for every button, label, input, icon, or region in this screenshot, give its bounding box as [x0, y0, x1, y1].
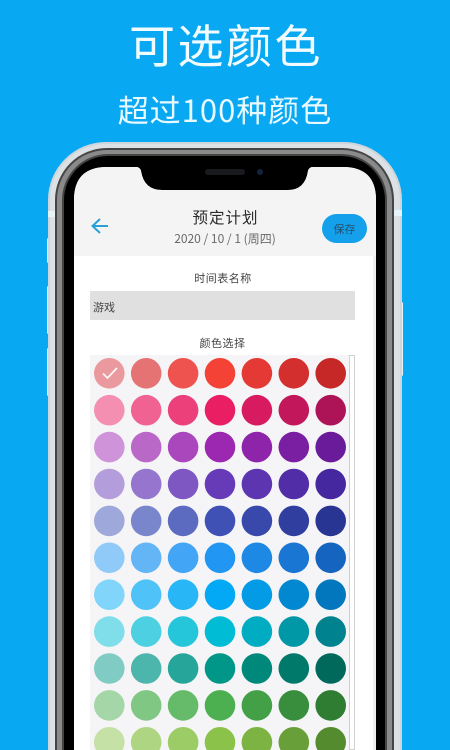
row: purple [94, 432, 346, 462]
label: color selection: 颜色选择 [200, 335, 246, 351]
icon: selected check [103, 368, 117, 378]
row: red [94, 358, 346, 389]
row: pink [94, 395, 346, 426]
row: green [94, 690, 346, 721]
icon: back arrow [92, 219, 108, 233]
notch camera and speaker [205, 169, 263, 175]
save button [322, 214, 367, 243]
row: light blue [94, 579, 346, 610]
screen [74, 167, 376, 750]
save button: 保存 [334, 221, 356, 237]
row: indigo [94, 506, 346, 536]
scrollbar [350, 356, 354, 750]
name input: 游戏 [93, 299, 115, 315]
screen right edge [373, 256, 376, 750]
row: light green [94, 727, 346, 750]
title: 可选颜色 [129, 11, 323, 77]
subtitle: 超过100种颜色 [118, 86, 332, 131]
phone body [48, 142, 402, 750]
app header [74, 167, 376, 256]
name input [90, 291, 355, 320]
color picker panel [90, 355, 354, 750]
row: cyan [94, 616, 346, 647]
header title: 预定计划 [192, 206, 259, 228]
row: teal [94, 653, 346, 684]
row: blue [94, 542, 346, 573]
row: deep purple [94, 469, 346, 499]
side buttons [47, 238, 403, 396]
label: schedule name: 时间表名称 [194, 270, 252, 286]
phone mockup [47, 142, 403, 750]
date: 2020 / 10 / 1 (周四) [174, 230, 276, 247]
